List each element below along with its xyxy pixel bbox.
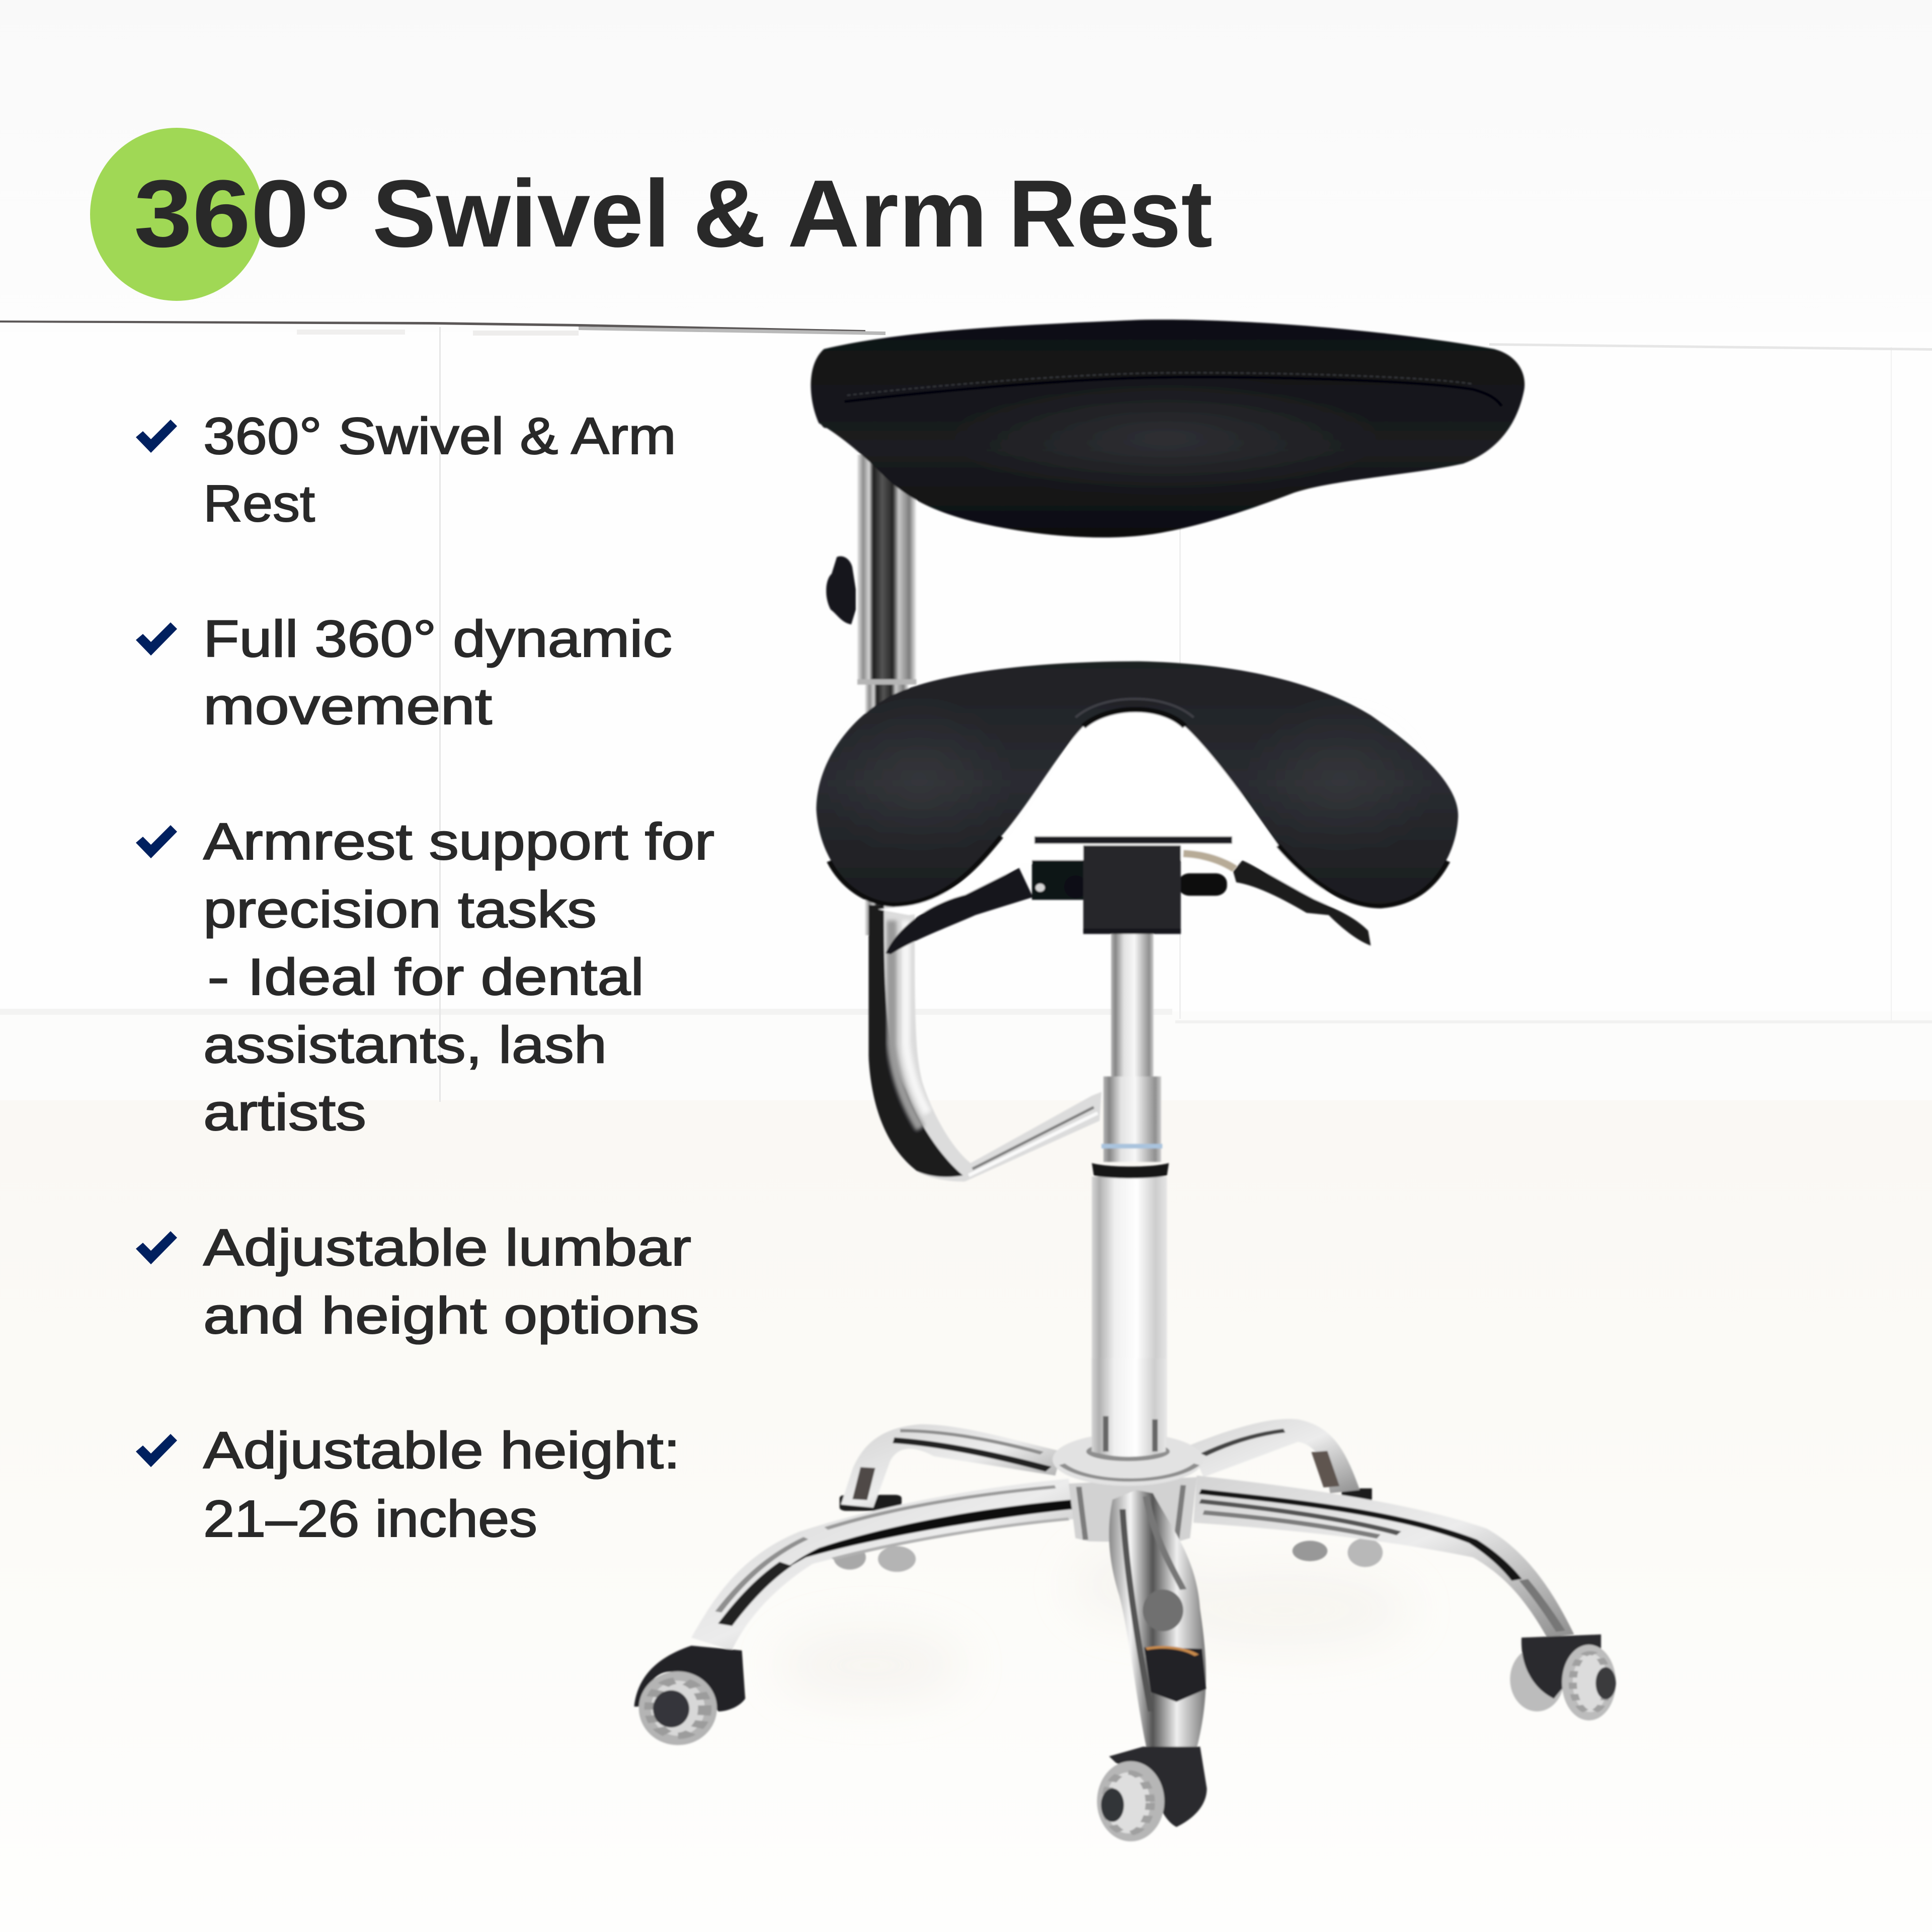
front left caster: [634, 1646, 745, 1745]
seat cushion: [816, 661, 1458, 906]
armrest lower tube and strut: [868, 905, 1101, 1181]
front left leg: [691, 1479, 1076, 1650]
green circle accent: [90, 128, 263, 301]
icon: check mark: [136, 1434, 177, 1467]
icon: check mark: [136, 1231, 177, 1264]
text: feature 3: precision tasks: [203, 880, 597, 938]
feature: armrest support: [136, 813, 714, 1141]
title: 360°: [134, 160, 351, 267]
text: feature 3: Ideal for dental: [248, 948, 644, 1006]
text: feature 5: Adjustable height:: [203, 1421, 680, 1479]
title: Swivel: [372, 160, 670, 267]
icon: check mark: [136, 825, 177, 858]
feature: dynamic movement: [136, 610, 672, 735]
text: feature 1: 360° Swivel & Arm: [203, 407, 676, 465]
icon: check mark: [136, 622, 177, 656]
text: feature 3: Armrest support for: [203, 813, 714, 870]
left lever: [886, 868, 1033, 954]
saddle seat: [816, 661, 1458, 915]
text: feature 2: Full 360° dynamic: [203, 610, 672, 668]
cable: [1183, 853, 1235, 869]
rear left leg: [841, 1424, 1062, 1508]
stool illustration: [634, 319, 1616, 1841]
text: feature 4: Adjustable lumbar: [203, 1219, 691, 1276]
gas lift column: [1092, 930, 1169, 1446]
text: feature 3: -: [207, 948, 229, 1006]
rear right leg: [1190, 1419, 1360, 1493]
front right caster: [1510, 1635, 1616, 1720]
stitched seam: [845, 377, 1502, 406]
feature: lumbar and height: [136, 1219, 699, 1344]
text: feature 1: Rest: [203, 474, 315, 532]
front center caster: [1097, 1747, 1207, 1841]
text: feature 5: 21–26 inches: [203, 1490, 537, 1548]
armrest pad: [811, 319, 1524, 537]
front center leg: [1109, 1490, 1206, 1748]
front right leg: [1193, 1476, 1574, 1638]
feature: swivel and arm rest: [136, 407, 676, 532]
mounting block: [1083, 845, 1181, 933]
right lever: [1233, 860, 1371, 946]
feature list: [136, 407, 714, 1548]
text: feature 3: assistants, lash: [203, 1016, 607, 1074]
armrest pole: [826, 455, 916, 935]
icon: check mark: [136, 420, 177, 453]
title: Rest: [1008, 160, 1213, 267]
feature: height range: [136, 1421, 680, 1548]
white seat shell: [878, 704, 1355, 915]
title: &: [693, 160, 766, 267]
swivel mechanism and levers: [886, 837, 1371, 954]
five-star chrome base: [634, 1358, 1616, 1841]
rear casters: [834, 1488, 1383, 1572]
title: Arm: [787, 160, 988, 267]
floor shadows: [775, 1550, 1414, 1701]
hub: [1069, 1477, 1197, 1543]
text: feature 3: artists: [203, 1083, 366, 1141]
text: feature 4: and height options: [203, 1286, 699, 1344]
text: feature 2: movement: [203, 677, 492, 735]
